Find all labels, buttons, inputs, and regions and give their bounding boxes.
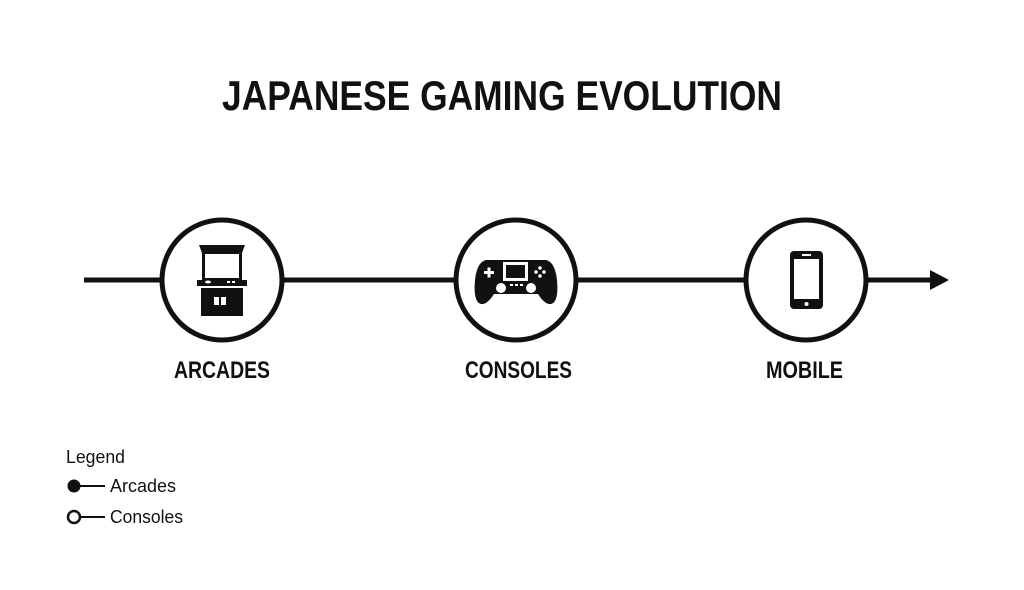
node: mobile [746, 220, 866, 340]
title: JAPANESE GAMING EVOLUTION [222, 72, 782, 119]
node: consoles [456, 220, 576, 340]
node: arcades [162, 220, 282, 340]
icon: arcade cabinet [197, 245, 247, 316]
legend: Legend [66, 447, 125, 467]
legend: Arcades [110, 476, 176, 496]
icon: gamepad [475, 260, 557, 304]
legend: Consoles [110, 507, 183, 527]
label: consoles: CONSOLES [465, 357, 572, 384]
icon: phone [790, 251, 823, 309]
legend [66, 447, 183, 527]
timeline arrow [84, 270, 949, 290]
label: mobile: MOBILE [766, 357, 843, 384]
label: arcades: ARCADES [174, 357, 270, 384]
